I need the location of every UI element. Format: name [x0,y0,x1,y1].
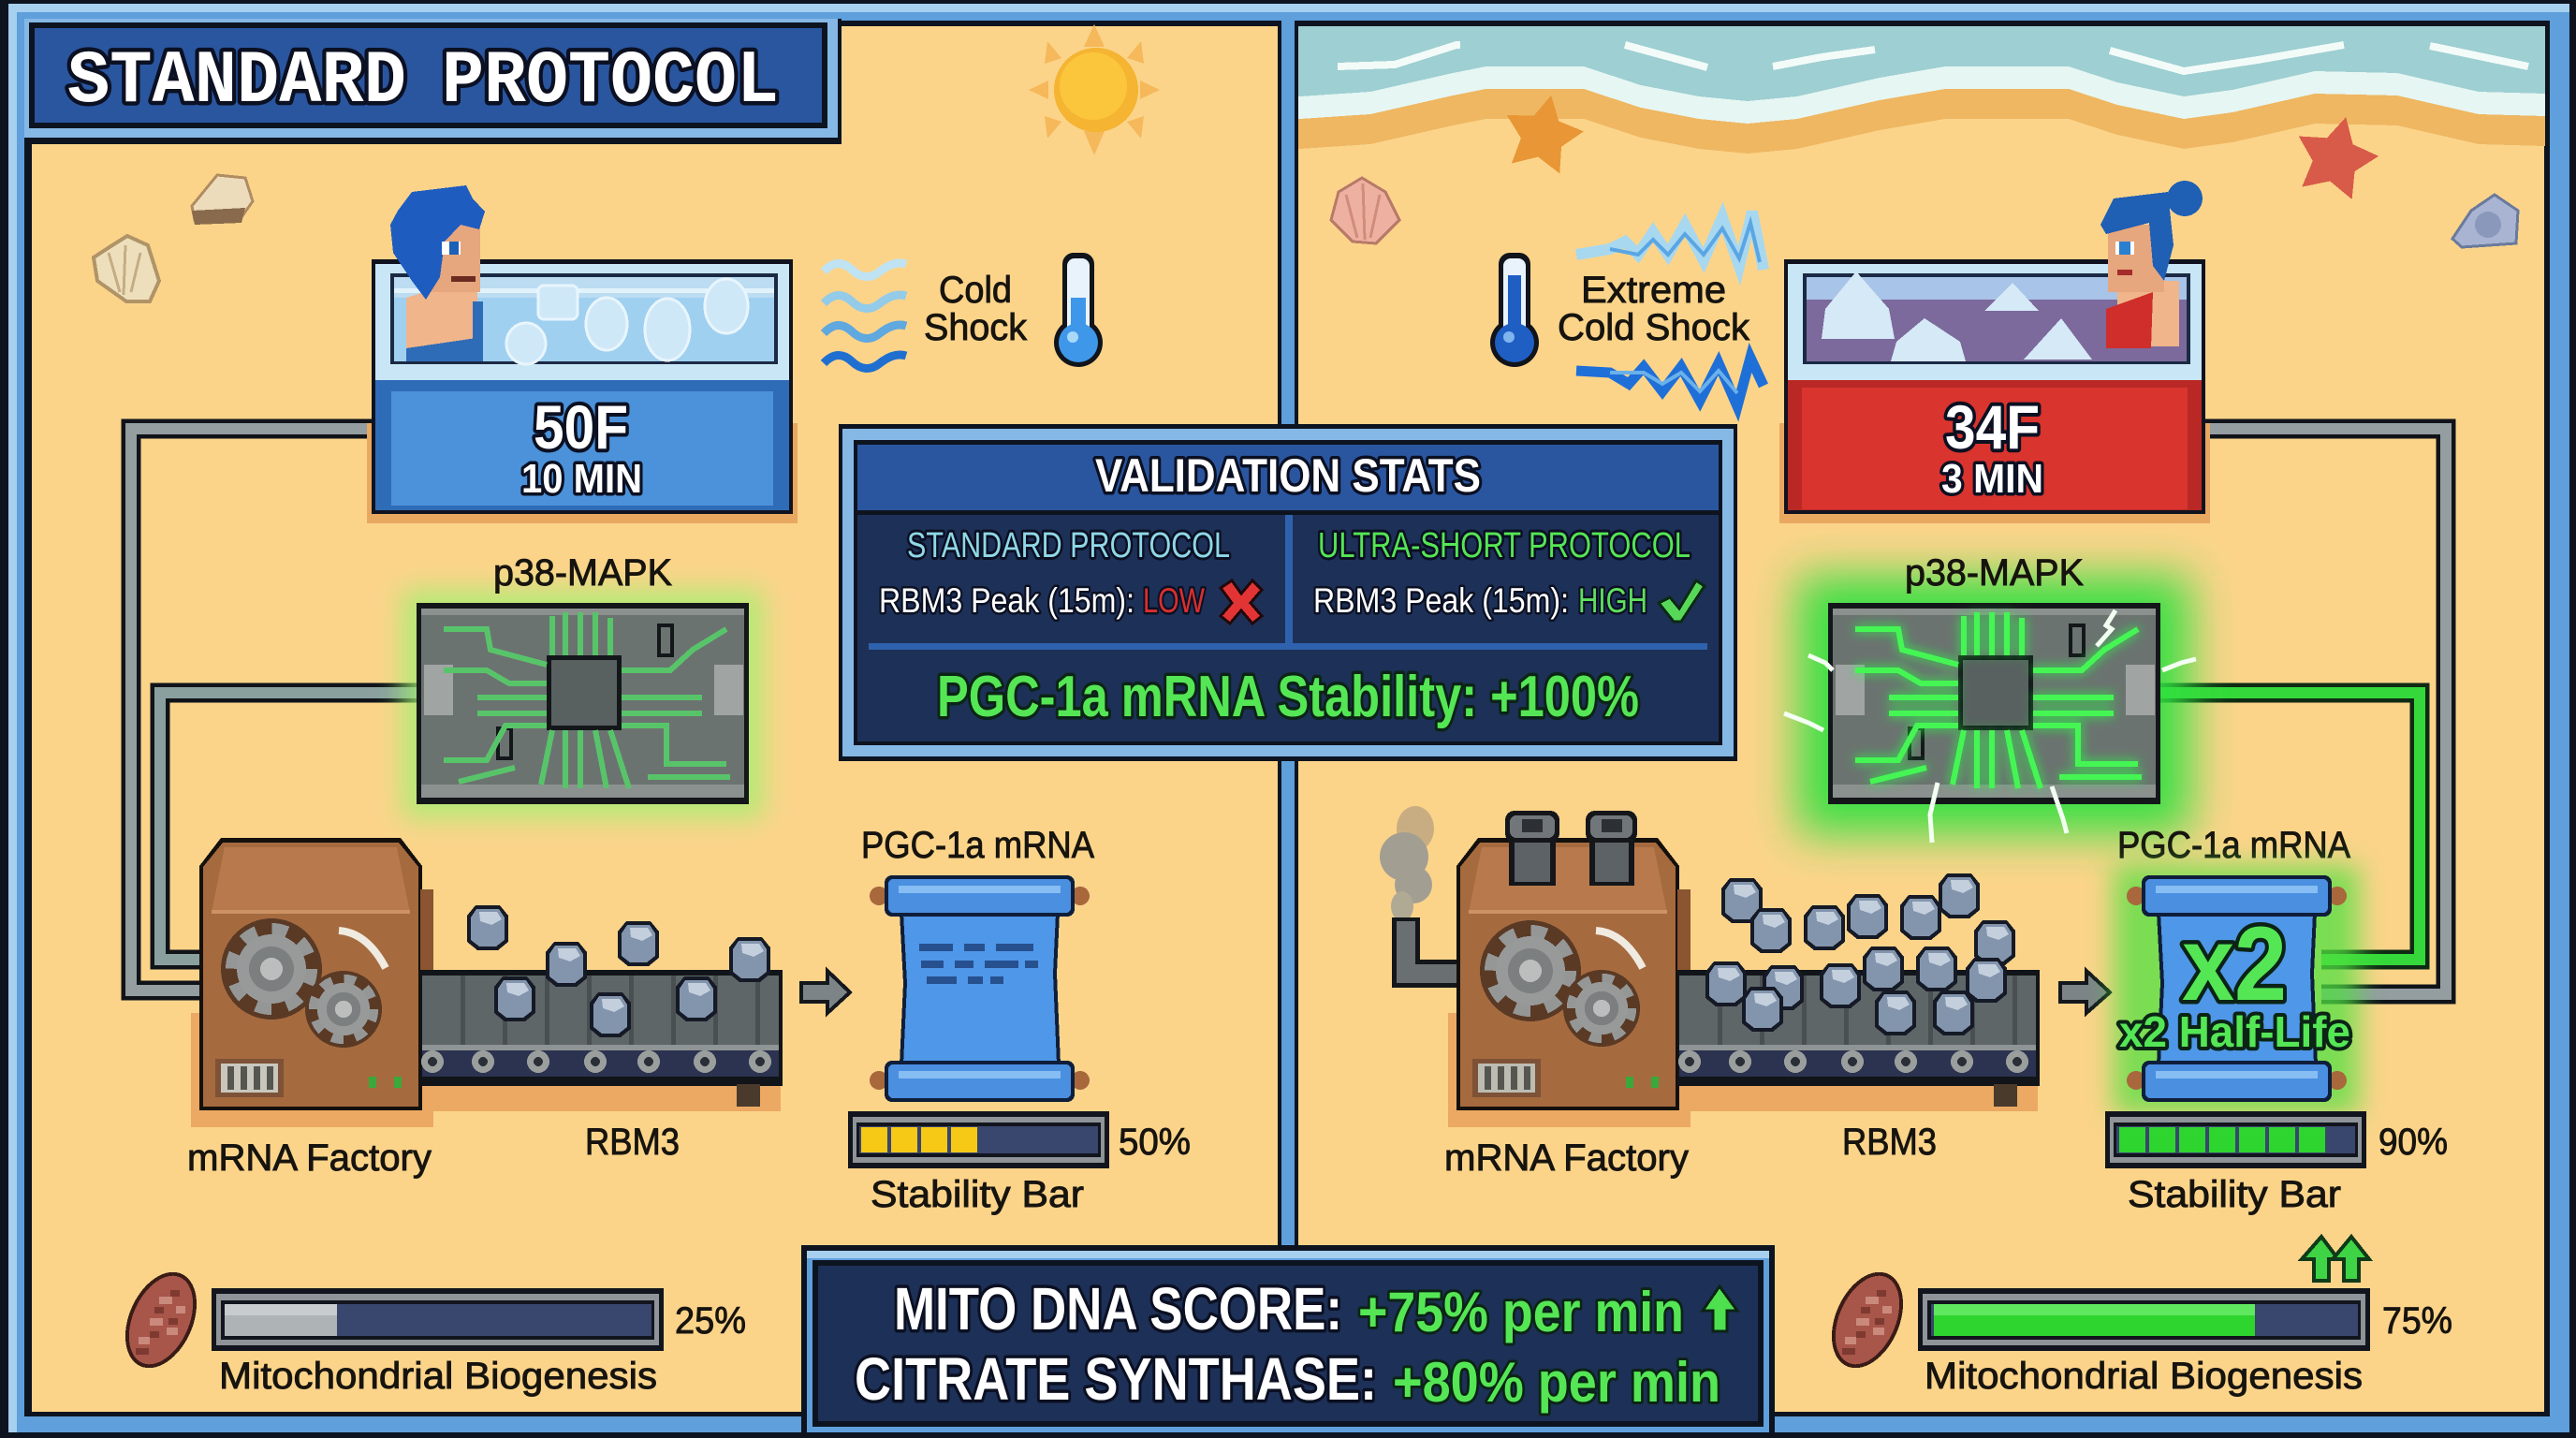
label: RBM3 right: RBM3 [1842,1122,1937,1163]
arrow: conveyor to scroll left [801,971,850,1013]
conveyor belt [420,970,783,1107]
value: 50% [1119,1122,1191,1163]
icon: shell blue [2452,195,2518,247]
factory: right mRNA factory [1380,806,2040,1127]
exhaust pipe [1406,917,1456,974]
duration label: 10 MIN [521,456,642,502]
chimneys [1505,811,1637,886]
stat line: citrate value: +80% per min [1393,1351,1720,1414]
tub: ultra-short 34F [1779,181,2210,523]
centre divider [1278,21,1298,1416]
temperature label: 34F [1945,392,2040,462]
scroll: right mRNA boosted [2114,866,2359,1114]
tub front [1788,380,2202,510]
factory: left mRNA factory [191,838,783,1127]
title [67,39,779,125]
stat: ultra-short RBM3: HIGH [1578,581,1647,620]
icon: up arrow [1703,1286,1737,1331]
icon: shell pink [1331,178,1399,243]
text: extreme cold shock [1558,270,1750,348]
icon: red cross [1221,580,1262,624]
RBM3 blocks left [467,905,770,1037]
biogenesis bar right [1918,1288,2452,1351]
label: mRNA factory right: mRNA Factory [1444,1137,1689,1179]
label: PGC-1a mRNA left: PGC-1a mRNA [861,825,1094,866]
icon: muscle right [1818,1261,1917,1379]
biogenesis bar left [212,1288,746,1351]
arrow: conveyor to scroll right [2060,971,2110,1013]
stat line: citrate label: CITRATE SYNTHASE: [855,1345,1377,1413]
chip: right p38-MAPK (activated) [1784,576,2196,843]
smoke [1380,806,1434,921]
panel: right sand background [1298,26,2544,1412]
pipe: right tub to scroll [2200,429,2446,994]
x2 mark: x2 [2182,905,2287,1022]
panel: validation stats [839,424,1737,761]
heading: VALIDATION STATS [1095,449,1481,502]
man bather [390,185,485,361]
label: stability bar right: Stability Bar [2128,1174,2341,1215]
value: 90% [2378,1122,2448,1163]
text: cold shock: Shock [924,307,1028,348]
stat: standard RBM3: RBM3 Peak (15m): [879,581,1134,620]
pipe: left chip to factory [160,693,421,960]
icon: double up arrows [2302,1237,2369,1281]
scroll: left mRNA [870,875,1090,1102]
title: STANDARD [67,39,406,125]
text: cold shock: Cold [939,270,1012,311]
headline stat: PGC-1a mRNA Stability: +100% [937,665,1639,729]
text: cold shock [924,270,1028,348]
label: mRNA factory left: mRNA Factory [187,1137,432,1179]
label: p38-MAPK left: p38-MAPK [493,552,672,594]
duration label: 3 MIN [1941,456,2043,502]
label: stability bar left: Stability Bar [871,1174,1084,1215]
half-life label: x2 Half-Life [2119,1007,2350,1056]
panel: mito score [801,1245,1775,1438]
column heading: standard: STANDARD PROTOCOL [907,526,1230,565]
pipe: right chip to scroll (green) [2153,693,2420,960]
panel: left sand background [32,26,1278,1412]
ice shards [1822,271,2092,361]
label: biogenesis right: Mitochondrial Biogenesis [1925,1356,2363,1397]
pipe: left tub to factory [131,429,374,990]
title banner [24,19,842,144]
icon: lightning upper [1576,212,1764,270]
ice cubes [506,279,748,364]
icon: muscle left [111,1261,211,1379]
tub front [375,380,789,510]
label: RBM3 left: RBM3 [585,1122,680,1163]
icon: shells left [94,175,253,301]
control panel [215,1059,402,1097]
label: PGC-1a mRNA right: PGC-1a mRNA [2117,825,2350,866]
RBM3 blocks right [1705,873,2015,1035]
stability bar left [848,1111,1191,1168]
icon: starfish orange [1497,87,1589,177]
icon: starfish red [2287,108,2386,203]
stat: standard RBM3: LOW [1143,581,1205,620]
icon: green check [1659,580,1705,622]
column heading: ultra-short: ULTRA-SHORT PROTOCOL [1318,526,1690,565]
stat line: mito DNA label: MITO DNA SCORE: [894,1275,1342,1343]
tub: standard 50F [367,185,798,523]
rotation arrow [339,931,386,968]
value: 25% [675,1300,746,1342]
stability bar right [2105,1111,2448,1168]
title: PROTOCOL [442,39,779,125]
icon: lightning lower [1576,358,1764,406]
icon: sun [1029,24,1160,155]
chip: left p38-MAPK [402,590,763,818]
beach water [1298,26,2545,154]
value: 75% [2382,1300,2452,1342]
text: extreme cold shock: Cold Shock [1558,307,1750,348]
temperature label: 50F [534,392,628,462]
icon: cold waves [824,263,906,369]
woman bather [2100,181,2203,348]
label: p38-MAPK right: p38-MAPK [1905,552,2084,594]
gears [221,918,382,1048]
stat line: mito DNA value: +75% per min [1358,1281,1684,1343]
stat: ultra-short RBM3: RBM3 Peak (15m): [1313,581,1569,620]
text: extreme cold shock: Extreme [1581,270,1726,311]
icon: thermometer left [1054,253,1103,367]
icon: thermometer right [1490,253,1539,367]
label: biogenesis left: Mitochondrial Biogenesis [219,1356,657,1397]
